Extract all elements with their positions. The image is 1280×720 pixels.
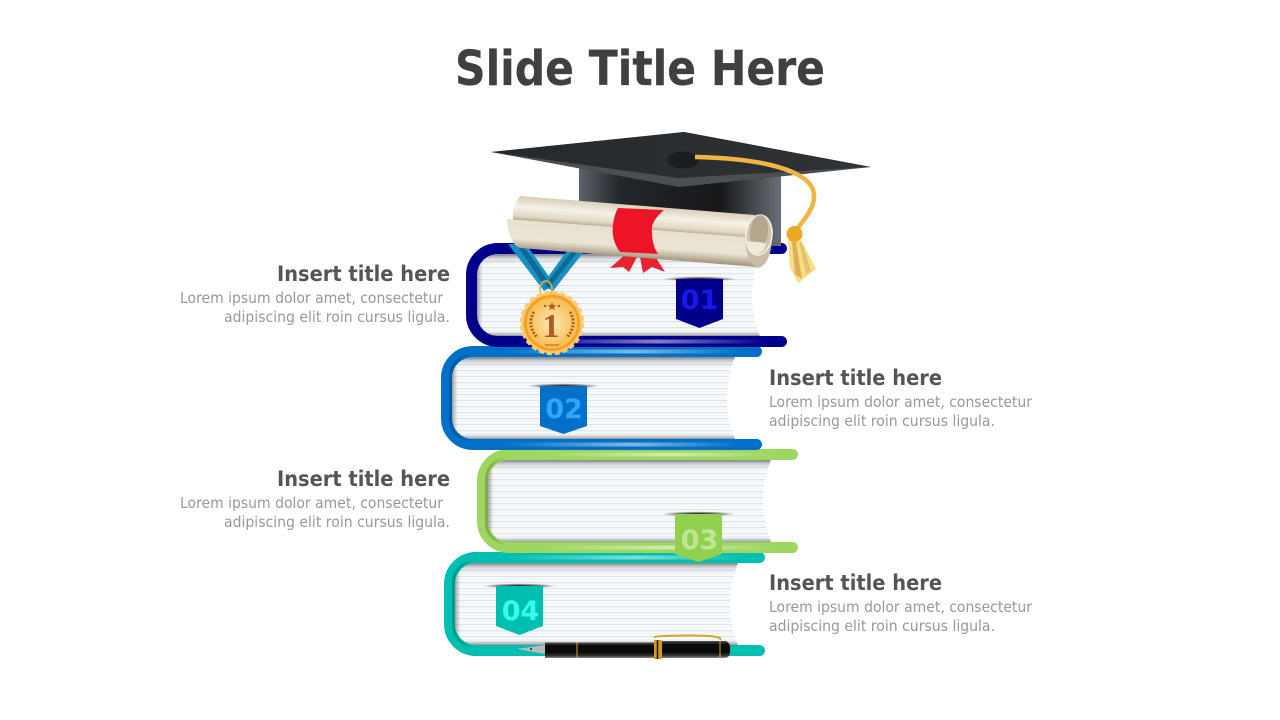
text block 1: Insert title here	[277, 262, 450, 286]
text block 2: adipiscing elit roin cursus ligula.	[769, 412, 995, 430]
bookmark 03	[662, 512, 736, 562]
text block 3	[180, 467, 450, 531]
icon: medal: 1	[542, 308, 560, 345]
bookmark 01: 01	[681, 285, 718, 316]
book 3: green	[482, 454, 792, 548]
book 2: blue	[446, 352, 756, 444]
text block 3: Lorem ipsum dolor amet, consectetur	[180, 494, 444, 512]
text block 3: Insert title here	[277, 467, 450, 491]
bookmark 04: 04	[502, 596, 539, 627]
text block 2: Insert title here	[769, 366, 942, 390]
text block 2: Lorem ipsum dolor amet, consectetur	[769, 393, 1033, 411]
text block 4: Insert title here	[769, 571, 942, 595]
text block 1	[180, 262, 450, 326]
title: Slide Title Here	[455, 41, 825, 97]
icon: graduation cap	[491, 132, 871, 283]
book 1: navy	[472, 248, 782, 342]
bookmark 02	[526, 384, 600, 434]
text block 4	[769, 571, 1033, 635]
icon: fountain pen	[517, 636, 730, 659]
text block 4: Lorem ipsum dolor amet, consectetur	[769, 598, 1033, 616]
book 4: teal	[450, 558, 760, 650]
bookmark 02: 02	[545, 394, 583, 425]
text block 4: adipiscing elit roin cursus ligula.	[769, 617, 995, 635]
icon: medal	[508, 244, 590, 354]
bookmark 03: 03	[681, 525, 718, 556]
bookmark 04	[482, 584, 556, 635]
bookmark 01	[662, 276, 736, 328]
icon: diploma scroll	[507, 196, 774, 273]
text block 1: Lorem ipsum dolor amet, consectetur	[180, 289, 444, 307]
text block 3: adipiscing elit roin cursus ligula.	[224, 513, 450, 531]
text block 1: adipiscing elit roin cursus ligula.	[224, 308, 450, 326]
text block 2	[769, 366, 1033, 430]
